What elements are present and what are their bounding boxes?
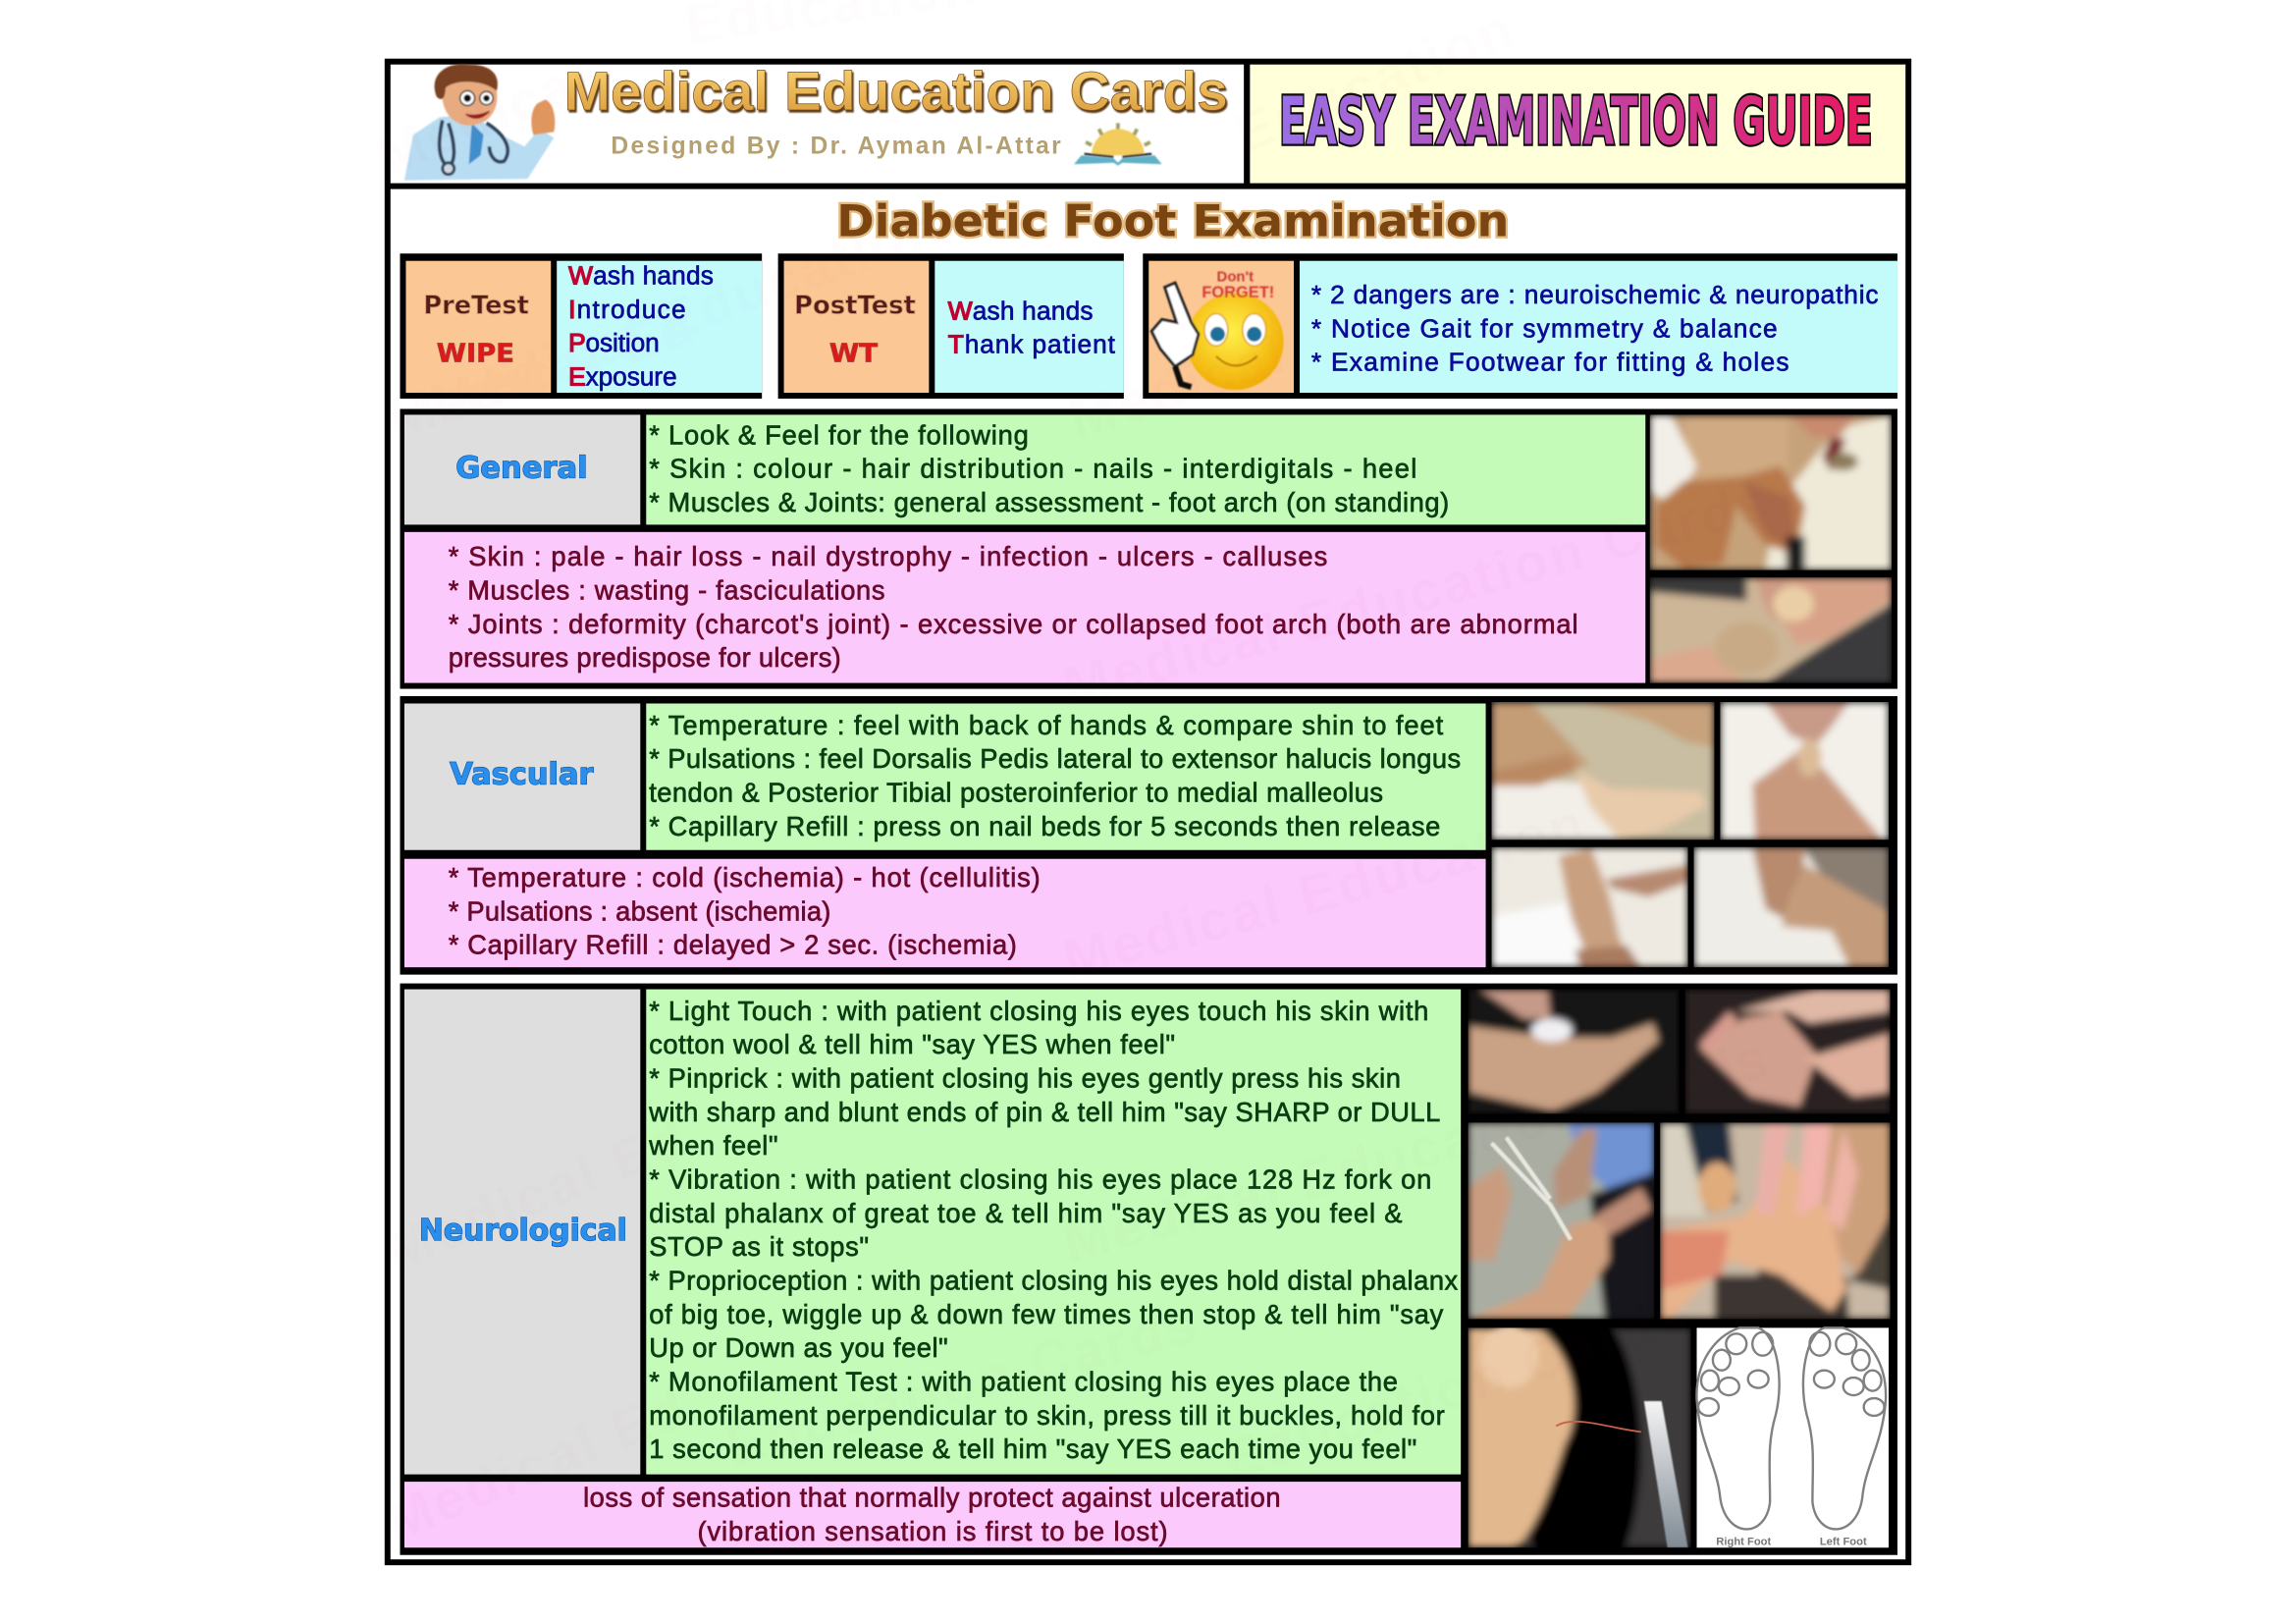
photo: cotton wool light touch bbox=[1468, 990, 1680, 1113]
photo: foot monofilament test sites diagram bbox=[1696, 1327, 1889, 1547]
heading: Easy Examination Guide: EASY EXAMINATION GUIDE bbox=[1279, 82, 1873, 159]
text: Neurological examination: monofilament perpendicular to skin, press till it buckles, hold for bbox=[649, 1400, 1445, 1431]
icon: sun and open book logo bbox=[1074, 123, 1162, 166]
text: reminders: * Notice Gait for symmetry & balance bbox=[1311, 313, 1778, 343]
watermark: repeated Medical Education Cards: Education bbox=[1227, 0, 1524, 166]
label: General: General bbox=[455, 452, 588, 486]
photo: pinprick test bbox=[1685, 990, 1891, 1113]
text: WIPE steps: Position bbox=[568, 328, 660, 357]
text: WIPE steps: Introduce bbox=[568, 295, 686, 324]
icon: smiley with raised finger: FORGET! bbox=[1201, 284, 1274, 301]
text: Neurological examination: when feel" bbox=[648, 1130, 778, 1161]
photo: capillary refill on toe bbox=[1720, 702, 1889, 839]
text: Neurological findings: (vibration sensation is first to be lost) bbox=[698, 1516, 1168, 1546]
text: WIPE steps bbox=[568, 261, 714, 392]
panel: General bbox=[400, 408, 1897, 689]
text: WT steps: Wash hands bbox=[948, 296, 1094, 325]
panel: PreTest WIPE bbox=[400, 253, 762, 399]
text: Neurological examination: Up or Down as you feel" bbox=[649, 1332, 948, 1363]
text: WT steps bbox=[948, 296, 1116, 359]
text: Neurological examination: * Monofilament Test : with patient closing his eyes place the bbox=[649, 1367, 1398, 1397]
text: Neurological examination: with sharp and blunt ends of pin & tell him "say SHARP or DULL bbox=[648, 1097, 1440, 1127]
watermark: repeated Medical Education Cards: Medical Ed bbox=[377, 1107, 697, 1284]
text: Neurological findings: loss of sensation that normally protect against ulceration bbox=[583, 1482, 1281, 1512]
label: Vascular: Vascular bbox=[450, 758, 594, 792]
watermark: repeated Medical Education Cards: Medical bbox=[1062, 324, 1295, 452]
text: Neurological examination: of big toe, wiggle up & down few times then stop & tell him "say bbox=[649, 1299, 1444, 1329]
photo: temperature check bbox=[1492, 702, 1714, 839]
text: Vascular findings: * Pulsations : absent (ischemia) bbox=[449, 895, 830, 926]
text: Vascular examination bbox=[649, 710, 1461, 841]
watermark: repeated Medical Education Cards: Medical bbox=[370, 46, 602, 188]
watermark: repeated Medical Education Cards: Medical Education bbox=[1057, 792, 1593, 992]
watermark: repeated Medical Education Cards bbox=[370, 0, 1778, 1553]
watermark: repeated Medical Education Cards: Education Cards bbox=[1215, 1283, 1697, 1492]
text: Vascular findings: * Capillary Refill : delayed > 2 sec. (ischemia) bbox=[449, 930, 1017, 960]
text: WT steps: Thank patient bbox=[948, 330, 1116, 359]
panel: Neurological bbox=[400, 984, 1897, 1597]
text: General examination: * Look & Feel for the following bbox=[649, 419, 1029, 450]
icon: left foot outline bbox=[1803, 1327, 1886, 1529]
icon: smiley with raised finger bbox=[1151, 269, 1284, 390]
text: Vascular examination: * Temperature : feel with back of hands & compare shin to feet bbox=[649, 710, 1444, 740]
panel: Vascular bbox=[400, 696, 1897, 975]
text: Vascular findings: * Temperature : cold (ischemia) - hot (cellulitis) bbox=[449, 862, 1041, 893]
text: WIPE steps: Exposure bbox=[568, 362, 677, 392]
label: PostTest: PostTest bbox=[794, 290, 916, 319]
heading: Medical Education Cards: Medical Education Cards bbox=[564, 61, 1228, 122]
text: Vascular findings bbox=[449, 862, 1041, 960]
text: designer credit: Designed By : Dr. Ayman Al-Attar bbox=[611, 134, 1061, 160]
text: General findings: * Joints : deformity (charcot's joint) - excessive or collapsed foot arch (both are abnormal bbox=[449, 609, 1578, 639]
photo: tuning fork vibration test bbox=[1468, 1122, 1654, 1319]
text: Don't forget: Don't bbox=[1217, 269, 1254, 286]
text: General findings: pressures predispose for ulcers) bbox=[449, 642, 841, 673]
watermark: repeated Medical Education Cards: Medical Ed bbox=[377, 1377, 697, 1553]
outer frame bbox=[385, 59, 1911, 1565]
label: WIPE: WIPE bbox=[437, 339, 514, 368]
text: Neurological examination: * Light Touch : with patient closing his eyes touch his skin with bbox=[649, 996, 1428, 1026]
text: General examination: * Muscles & Joints: general assessment - foot arch (on standing) bbox=[649, 487, 1449, 517]
caption: Left Foot: Left Foot bbox=[1820, 1536, 1867, 1547]
icon: right foot outline bbox=[1696, 1327, 1780, 1529]
caption: Right Foot: Right Foot bbox=[1716, 1536, 1771, 1547]
label: WT: WT bbox=[829, 339, 879, 368]
heading: Diabetic Foot Examination: Diabetic Foot Examination bbox=[836, 194, 1509, 246]
watermark: repeated Medical Education Cards: Education Cards bbox=[720, 1292, 1205, 1478]
icon: cartoon doctor bbox=[404, 64, 555, 181]
text: Vascular examination: * Pulsations : feel Dorsalis Pedis lateral to extensor halucis longus bbox=[649, 743, 1461, 774]
watermark: repeated Medical Education Cards: Medical Education Cards bbox=[1057, 1027, 1778, 1275]
label: Neurological: Neurological bbox=[419, 1214, 627, 1248]
text: General findings: * Skin : pale - hair loss - nail dystrophy - infection - ulcers - calluses bbox=[449, 541, 1327, 571]
photo: pulse check on dorsum of foot bbox=[1492, 847, 1688, 967]
photo: thumb pressing foot bbox=[1650, 577, 1892, 683]
watermark: repeated Medical Education Cards: Medical Ed bbox=[381, 294, 704, 452]
text: General findings: * Muscles : wasting - fasciculations bbox=[449, 575, 885, 606]
text: WIPE steps: Wash hands bbox=[568, 261, 714, 291]
text: Vascular examination: * Capillary Refill : press on nail beds for 5 seconds then release bbox=[649, 811, 1440, 841]
text: Neurological examination: * Vibration : with patient closing his eyes place 128 Hz fork on bbox=[649, 1164, 1431, 1195]
panel: header banner bbox=[391, 61, 1905, 184]
panel: PostTest WT bbox=[778, 253, 1124, 399]
text: reminders: * Examine Footwear for fitting & holes bbox=[1311, 348, 1789, 377]
photo: monofilament test bbox=[1468, 1327, 1690, 1547]
text: Neurological examination: STOP as it stops" bbox=[649, 1231, 869, 1262]
text: Neurological examination: distal phalanx of great toe & tell him "say YES as you feel & bbox=[649, 1198, 1402, 1228]
text: Vascular examination: tendon & Posterior Tibial posteroinferior to medial malleolus bbox=[649, 777, 1383, 807]
text: reminders bbox=[1311, 280, 1879, 377]
header divider bbox=[1244, 65, 1250, 185]
text: Neurological examination: * Pinprick : with patient closing his eyes gently press his skin bbox=[649, 1063, 1401, 1094]
text: Neurological examination: * Proprioception : with patient closing his eyes hold distal phalanx bbox=[649, 1266, 1459, 1296]
text: General examination bbox=[649, 419, 1449, 517]
text: General examination: * Skin : colour - hair distribution - nails - interdigitals - heel bbox=[649, 454, 1416, 484]
panel: Don't forget bbox=[1143, 253, 1897, 399]
watermark: repeated Medical Education Cards: Medical Education Cards bbox=[1057, 470, 1778, 719]
text: Neurological examination bbox=[648, 996, 1459, 1464]
text: General findings bbox=[449, 541, 1578, 673]
photo: doctor holding foot bbox=[1650, 414, 1892, 570]
text: Neurological findings bbox=[583, 1482, 1281, 1546]
label: PreTest: PreTest bbox=[423, 290, 529, 319]
inner page background bbox=[391, 189, 1905, 1559]
watermark: repeated Medical Education Cards: Medical Education bbox=[423, 194, 950, 437]
text: reminders: * 2 dangers are : neuroischemic & neuropathic bbox=[1311, 280, 1879, 309]
photo: proprioception test on big toe bbox=[1660, 1122, 1891, 1319]
text: Neurological examination: cotton wool & tell him "say YES when feel" bbox=[649, 1029, 1175, 1059]
text: Neurological examination: 1 second then release & tell him "say YES each time you feel" bbox=[649, 1434, 1416, 1464]
photo: posterior tibial pulse check bbox=[1694, 847, 1889, 967]
